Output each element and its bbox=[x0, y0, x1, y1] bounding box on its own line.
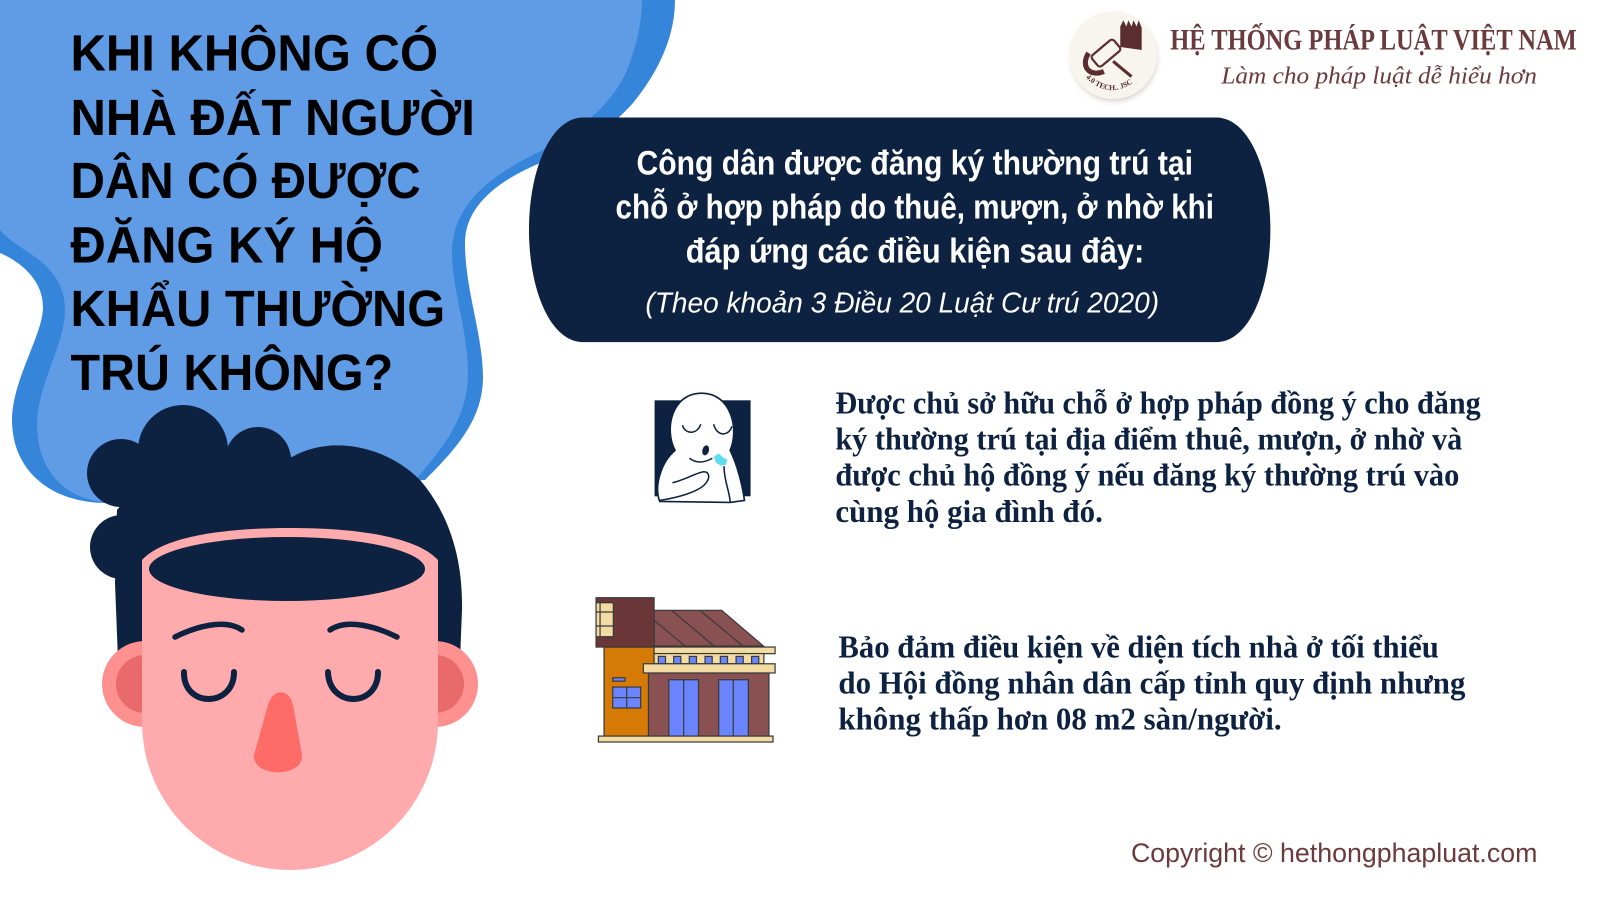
panel heading: đáp ứng các điều kiện sau đây: bbox=[686, 232, 1144, 270]
title: TRÚ KHÔNG? bbox=[70, 343, 393, 401]
icon: person agreeing bbox=[655, 393, 751, 502]
logo: 4.0 TECH.. JSC bbox=[1086, 76, 1132, 90]
title: DÂN CÓ ĐƯỢC bbox=[70, 151, 421, 209]
title: ĐĂNG KÝ HỘ bbox=[70, 215, 383, 273]
text: condition 1: Được chủ sở hữu chỗ ở hợp pháp đồng ý cho đăng bbox=[835, 386, 1481, 421]
text: condition 2: Bảo đảm điều kiện về diện tích nhà ở tối thiểu bbox=[838, 630, 1439, 665]
panel heading: Công dân được đăng ký thường trú tại bbox=[636, 145, 1193, 183]
hair bbox=[87, 405, 462, 660]
text: condition 1: được chủ hộ đồng ý nếu đăng ký thường trú vào bbox=[835, 458, 1459, 493]
blue thought blob bbox=[0, 0, 675, 503]
nose bbox=[254, 692, 302, 772]
panel heading: chỗ ở hợp pháp do thuê, mượn, ở nhờ khi bbox=[616, 187, 1214, 227]
text: condition 2: do Hội đồng nhân dân cấp tỉnh quy định nhưng bbox=[838, 665, 1466, 700]
text: condition 2: không thấp hơn 08 m2 sàn/người. bbox=[838, 702, 1282, 737]
legal citation: (Theo khoản 3 Điều 20 Luật Cư trú 2020) bbox=[645, 287, 1159, 319]
title: KHI KHÔNG CÓ bbox=[70, 23, 438, 81]
text: condition 1: cùng hộ gia đình đó. bbox=[835, 494, 1103, 529]
eyes bbox=[184, 672, 378, 699]
eyebrows bbox=[175, 624, 397, 637]
title: KHẨU THƯỜNG bbox=[70, 279, 445, 337]
panel: conditions intro bbox=[529, 117, 1270, 342]
scalp opening bbox=[149, 537, 425, 601]
logo bbox=[1068, 11, 1160, 104]
copyright: Copyright © hethongphapluat.com bbox=[1131, 838, 1537, 868]
text: condition 1: ký thường trú tại địa điểm thuê, mượn, ở nhờ và bbox=[835, 421, 1463, 456]
title: NHÀ ĐẤT NGƯỜI bbox=[70, 88, 475, 146]
ears bbox=[102, 641, 478, 727]
tagline: Làm cho pháp luật dễ hiểu hơn bbox=[1220, 63, 1537, 90]
illustration: head bbox=[87, 405, 478, 870]
face bbox=[142, 528, 438, 870]
icon: house bbox=[596, 598, 775, 742]
